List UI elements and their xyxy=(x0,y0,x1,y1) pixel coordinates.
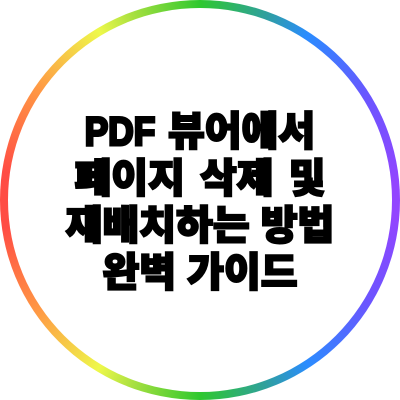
title: 뷰어에서 xyxy=(168,110,315,154)
title: 재배치하는 방법 xyxy=(66,204,334,248)
title xyxy=(64,110,334,295)
title: 페이지 삭제 및 xyxy=(74,157,326,201)
title: 완벽 가이드 xyxy=(102,251,298,295)
title: PDF xyxy=(85,110,155,154)
